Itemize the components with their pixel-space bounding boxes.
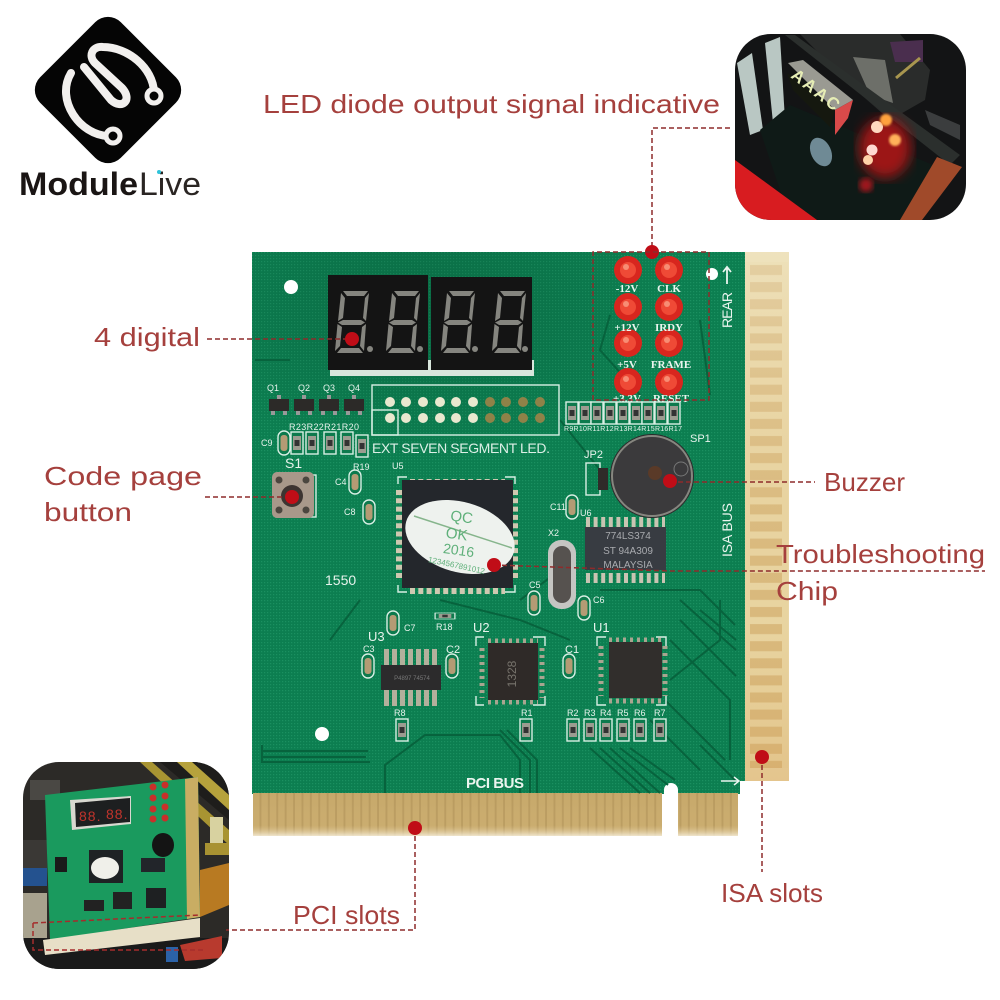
- small resistors and capacitors: R4: [600, 708, 612, 718]
- small resistors and capacitors: C9: [261, 438, 273, 448]
- board shading: [252, 252, 746, 552]
- PCI gold edge: [253, 783, 738, 843]
- small resistors and capacitors: R18: [436, 622, 453, 632]
- small resistors and capacitors: R3: [584, 708, 596, 718]
- label: code page button: Code page: [44, 461, 202, 491]
- photo dashed outline: [33, 915, 205, 950]
- small resistors and capacitors: R19: [353, 462, 370, 472]
- label: ISA slots: ISA slots: [721, 878, 823, 908]
- transistors Q1-Q4: Q1: [267, 383, 279, 393]
- small resistors and capacitors: JP2: [584, 449, 603, 461]
- buzzer SP1: [610, 434, 694, 518]
- leader: chip: [494, 565, 985, 571]
- board body: [252, 252, 746, 794]
- transistors Q1-Q4: Q3: [323, 383, 335, 393]
- chip U2: [476, 637, 545, 705]
- photo card: [45, 777, 200, 940]
- LED indicators: FRAME: [651, 359, 691, 371]
- small resistors and capacitors: 1550: [325, 572, 356, 588]
- crystal X2: [548, 540, 576, 609]
- logic chip 74LS374: [585, 522, 666, 578]
- LED indicators: -12V: [616, 283, 638, 295]
- small resistors and capacitors: C2: [446, 644, 460, 656]
- small resistors and capacitors: X2: [548, 528, 559, 538]
- pin header: [372, 385, 559, 435]
- ISA marker: [755, 750, 769, 764]
- leader: button: [205, 496, 292, 498]
- logic chip 74LS374: ST 94A309: [603, 546, 653, 557]
- small resistors and capacitors: C6: [593, 595, 605, 605]
- photo card: 88.: [106, 806, 128, 822]
- digital marker: [345, 332, 359, 346]
- logic chip 74LS374: 774LS374: [605, 531, 651, 542]
- main troubleshooting chip U5: OK: [445, 525, 469, 544]
- photo motherboard: [23, 762, 229, 969]
- small resistors and capacitors: C5: [529, 580, 541, 590]
- logo wordmark: Live: [139, 166, 201, 202]
- photo display: AAAC: [788, 65, 843, 115]
- small resistors and capacitors: R5: [617, 708, 629, 718]
- label: troubleshooting chip: Troubleshooting: [776, 539, 985, 569]
- photo card: 88.: [79, 808, 101, 824]
- small resistors and capacitors: U1: [593, 620, 610, 635]
- inset photo: card in slot: [23, 762, 229, 969]
- transistors Q1-Q4: Q4: [348, 383, 360, 393]
- leader: PCI: [226, 828, 415, 930]
- photo glowing LEDs: [859, 114, 911, 192]
- leader: 4 digital: [207, 338, 352, 340]
- leader: LED: [652, 128, 730, 252]
- bus labels: REAR: [719, 292, 735, 328]
- label: troubleshooting chip: Chip: [776, 576, 838, 606]
- chip U1: [597, 637, 666, 705]
- LED indicators: +3.3V: [613, 393, 641, 405]
- photo red cable: [735, 160, 817, 220]
- dashed box around LEDs: [593, 252, 709, 400]
- inset photo: card powered in PC: [735, 34, 966, 220]
- ISA gold edge: [745, 252, 789, 781]
- small resistors and capacitors: R23R22R21R20: [289, 422, 359, 432]
- transistors Q1-Q4: [267, 383, 364, 415]
- transistors Q1-Q4: Q2: [298, 383, 310, 393]
- chip U2: 1328: [505, 660, 519, 687]
- small resistors and capacitors: SP1: [690, 433, 711, 445]
- small resistors and capacitors: R8: [394, 708, 406, 718]
- small resistors and capacitors: [261, 402, 711, 741]
- small resistors and capacitors: R1: [521, 708, 533, 718]
- small resistors and capacitors: U2: [473, 620, 490, 635]
- small resistors and capacitors: R6: [634, 708, 646, 718]
- small resistors and capacitors: R7: [654, 708, 666, 718]
- bus labels: [466, 267, 739, 792]
- photo card body: [760, 110, 785, 131]
- title label: LED output: LED diode output signal indicative: [263, 89, 720, 119]
- main troubleshooting chip U5: [397, 477, 523, 592]
- board traces: [255, 315, 736, 793]
- chip U3: P4897 74574: [394, 676, 431, 682]
- small resistors and capacitors: U3: [368, 629, 385, 644]
- photo gold edge: [900, 157, 962, 220]
- label: buzzer: Buzzer: [824, 467, 905, 497]
- small resistors and capacitors: C11: [550, 502, 566, 512]
- small resistors and capacitors: C7: [404, 623, 416, 633]
- bus labels: PCI BUS: [466, 775, 524, 792]
- logo icon: circuit diamond: [27, 9, 189, 171]
- mounting holes: [284, 268, 718, 741]
- logo wordmark: [19, 166, 201, 202]
- label: code page button: button: [44, 497, 132, 527]
- label: troubleshooting chip: [776, 539, 985, 606]
- logic chip 74LS374: MALAYSIA: [603, 560, 653, 571]
- bus labels: ISA BUS: [719, 503, 735, 557]
- LED indicators: CLK: [657, 283, 681, 295]
- small resistors and capacitors: R2: [567, 708, 579, 718]
- LED indicators: +12V: [614, 322, 640, 334]
- label: PCI slots: PCI slots: [293, 900, 400, 930]
- small resistors and capacitors: U5: [392, 461, 404, 471]
- LED indicators: RESET: [653, 393, 690, 405]
- silkscreen label: EXT SEVEN SEGMENT LED.: [372, 440, 550, 456]
- label: 4 digital: 4 digital: [94, 322, 200, 352]
- LED indicators: [613, 256, 691, 405]
- photo slot: [43, 918, 200, 955]
- logo: ModuleLive: [19, 9, 201, 202]
- small resistors and capacitors: S1: [285, 455, 302, 471]
- PCI marker: [408, 821, 422, 835]
- main troubleshooting chip U5: 2016: [442, 540, 475, 560]
- push button S1: [272, 472, 316, 518]
- photo display: [787, 60, 853, 135]
- small resistors and capacitors: C3: [363, 644, 375, 654]
- small resistors and capacitors: C4: [335, 477, 347, 487]
- small resistors and capacitors: C8: [344, 507, 356, 517]
- small resistors and capacitors: C1: [565, 644, 579, 656]
- panel: circuit board: [252, 252, 789, 843]
- chip marker: [487, 558, 501, 572]
- leader: buzzer: [670, 481, 815, 483]
- logo wordmark: Module: [19, 166, 138, 202]
- LED marker: [645, 245, 659, 259]
- small resistors and capacitors: U6: [580, 508, 592, 518]
- jumper JP2: [586, 463, 608, 495]
- label: code page button: [44, 461, 202, 527]
- photo background parts: [737, 34, 960, 165]
- main troubleshooting chip U5: QC: [449, 508, 474, 528]
- leader: ISA: [761, 757, 763, 872]
- buzzer marker: [663, 474, 677, 488]
- LED indicators: IRDY: [655, 322, 683, 334]
- small resistors and capacitors: R9R10R11R12R13R14R15R16R17: [564, 426, 682, 433]
- main troubleshooting chip U5: 1234567891012: [427, 555, 486, 576]
- seven segment display: [328, 275, 534, 376]
- chip U3: [381, 657, 441, 698]
- button marker: [285, 490, 299, 504]
- LED indicators: +5V: [617, 359, 637, 371]
